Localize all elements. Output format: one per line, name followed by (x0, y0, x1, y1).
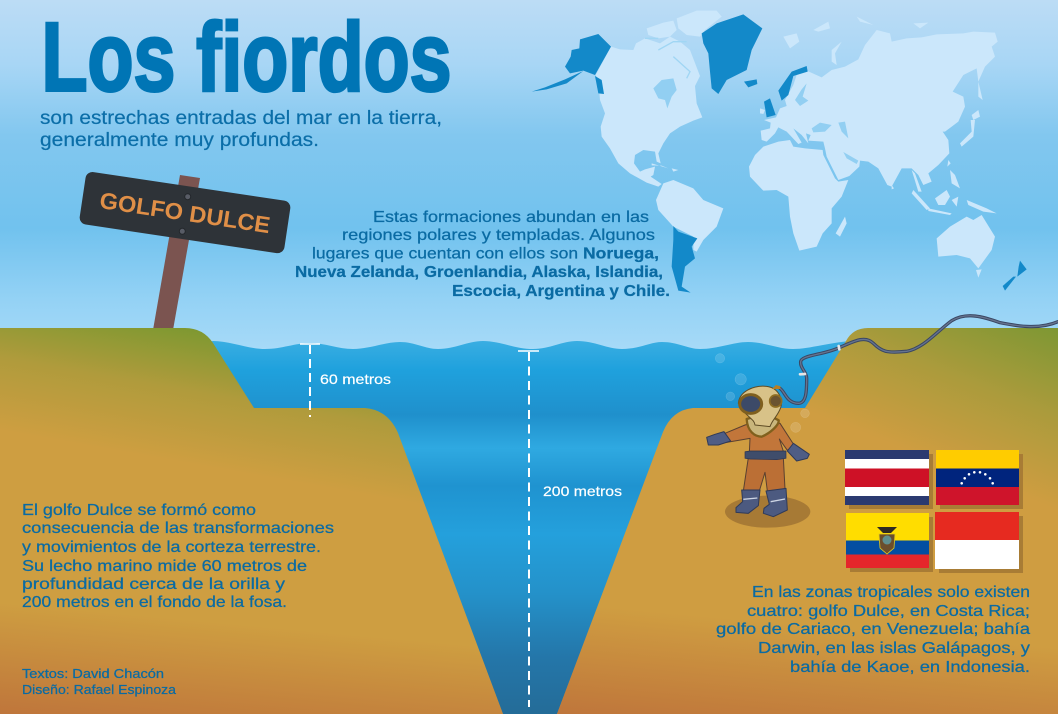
boot bands (743, 498, 785, 502)
subtitle: generalmente muy profundas. (40, 130, 319, 151)
text block: formation of golfo Dulce: Su lecho marino mide 60 metros de (22, 558, 307, 575)
coat of arms (877, 527, 897, 554)
text block: formation of golfo Dulce: 200 metros en el fondo de la fosa. (22, 594, 287, 611)
subtitle (40, 108, 442, 151)
stars (960, 471, 994, 485)
sign board (79, 171, 291, 254)
side porthole (770, 395, 782, 407)
helmet collar (747, 417, 779, 437)
text block: where fjords abound: regiones polares y templadas. Algunos (342, 227, 655, 244)
left land bottom shading (0, 560, 503, 714)
text block: tropical fjords: cuatro: golfo Dulce, en Costa Rica; (747, 603, 1030, 620)
hose clips (800, 346, 839, 374)
label: 60 metros: 60 metros (320, 371, 391, 387)
text block: formation of golfo Dulce: profundidad cerca de la orilla y (22, 576, 285, 593)
text block: formation of golfo Dulce: y movimientos de la corteza terrestre. (22, 539, 321, 556)
sign screws (179, 194, 191, 234)
flag: Indonesia (935, 512, 1023, 573)
text block: tropical fjords: bahía de Kaoe, en Indonesia. (790, 659, 1030, 676)
text block: tropical fjords: Darwin, en las islas Galápagos, y (758, 640, 1030, 657)
right land bottom shading (557, 570, 1058, 714)
text block: where fjords abound: Estas formaciones abundan en las (373, 209, 649, 226)
sign post (153, 175, 200, 330)
map: light land masses (596, 11, 998, 278)
map: highlighted fjord countries (532, 14, 1027, 293)
text block: tropical fjords (716, 584, 1030, 676)
left land (0, 328, 503, 714)
text block: where fjords abound (295, 209, 670, 300)
text block: where fjords abound: lugares que cuentan con ellos son Noruega, (312, 246, 659, 262)
water (190, 340, 860, 714)
text block: where fjords abound: Nueva Zelanda, Groenlandia, Alaska, Islandia, (295, 264, 663, 281)
world map (532, 11, 1027, 293)
flag: Costa Rica (845, 450, 933, 509)
face porthole (740, 395, 762, 413)
diver (707, 385, 810, 528)
text block: formation of golfo Dulce (22, 502, 334, 611)
text block: formation of golfo Dulce: consecuencia de las transformaciones (22, 520, 334, 537)
helmet dome (738, 386, 781, 427)
helmet valve (772, 385, 781, 389)
credits (22, 666, 177, 697)
credits: Diseño: Rafael Espinoza (22, 682, 177, 697)
gloves (707, 432, 809, 461)
bubbles (715, 354, 809, 432)
sign label: GOLFO DULCE (98, 187, 272, 238)
flag: Ecuador (846, 513, 933, 572)
flag: Venezuela (936, 450, 1023, 509)
title: Los fiordos (42, 2, 452, 112)
depth marker: 200 metros (518, 351, 539, 707)
depth marker: 60 metros (300, 344, 320, 417)
boots (736, 488, 787, 517)
text block: formation of golfo Dulce: El golfo Dulce se formó como (22, 502, 256, 519)
credits: Textos: David Chacón (22, 666, 164, 681)
legs (743, 458, 785, 491)
map: inland seas (653, 78, 858, 164)
diver shadow (725, 496, 810, 528)
hose highlight (780, 316, 1058, 403)
label: 200 metros: 200 metros (543, 483, 622, 499)
signpost: Golfo Dulce (79, 171, 291, 330)
text block: where fjords abound: Escocia, Argentina y Chile. (452, 283, 670, 300)
subtitle: son estrechas entradas del mar en la tierra, (40, 108, 442, 129)
map: arctic channels (645, 38, 690, 78)
belt (745, 451, 786, 460)
air hose (780, 316, 1058, 403)
right land (557, 328, 1058, 714)
arms and torso (725, 421, 794, 453)
text block: tropical fjords: En las zonas tropicales solo existen (752, 584, 1030, 601)
text block: tropical fjords: golfo de Cariaco, en Venezuela; bahía (716, 621, 1030, 638)
